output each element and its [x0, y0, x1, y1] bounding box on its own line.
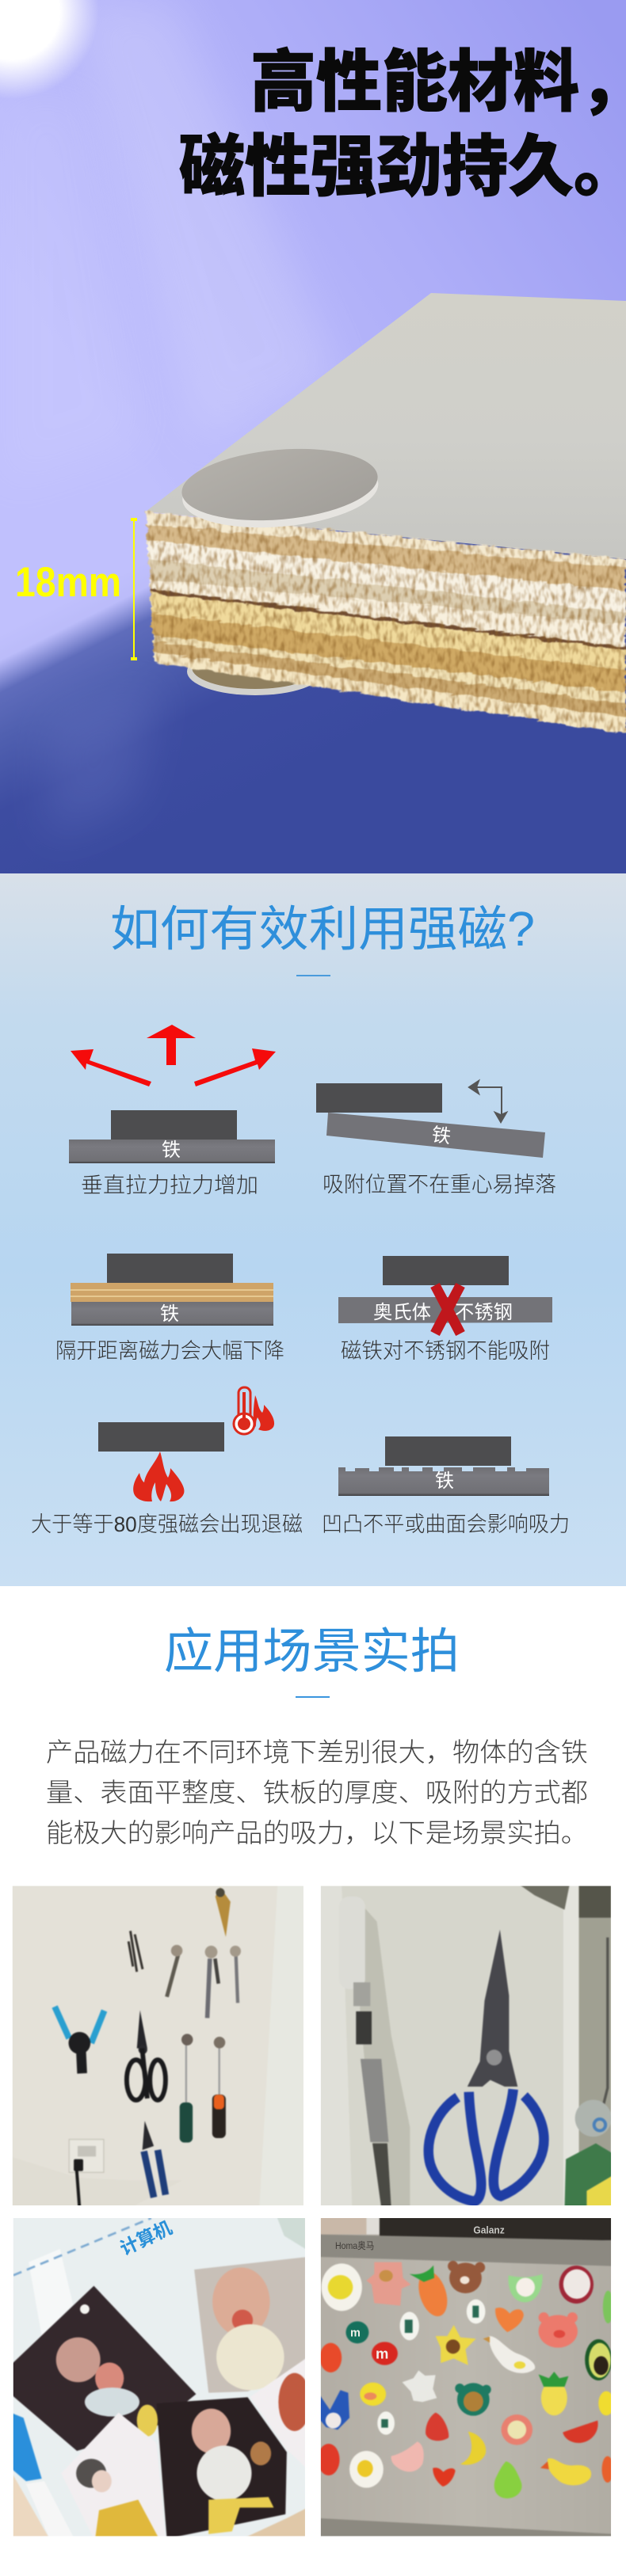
green screwdriver	[180, 2034, 193, 2143]
intro paragraph: 产品磁力在不同环境下差别很大，物体的含铁	[46, 1737, 588, 1767]
caption: 磁铁对不锈钢不能吸附	[341, 1339, 550, 1363]
tip: stainless steel	[338, 1256, 552, 1363]
heading: 如何有效利用强磁?	[110, 902, 535, 956]
m candy labels: m	[350, 2327, 361, 2340]
dimension line	[131, 518, 137, 660]
bottom magnet disc	[187, 667, 311, 695]
heading underline	[296, 1696, 330, 1698]
bent arrow	[469, 1081, 506, 1122]
magnet block	[316, 1083, 442, 1113]
hero background sky	[0, 0, 626, 873]
red hair card	[252, 2358, 305, 2465]
brand labels: Galanz	[473, 2225, 505, 2236]
top magnet disc	[182, 448, 379, 527]
frog magnet	[455, 2383, 491, 2416]
heart and pig face magnets	[495, 2308, 578, 2348]
m candy labels: m	[376, 2346, 388, 2362]
green cat and dragonfruit magnets	[509, 2266, 594, 2304]
headline	[179, 45, 626, 205]
red arrows	[71, 1025, 276, 1086]
black scissors	[127, 2010, 166, 2100]
baby with bib photo	[194, 2257, 307, 2393]
pineapple magnet	[539, 2372, 568, 2415]
board top surface	[146, 293, 626, 559]
banana and hearts magnets	[391, 2432, 486, 2487]
photo: baby photos on whiteboard	[10, 2216, 311, 2539]
tip: heat demagnetisation	[31, 1387, 303, 1536]
intro paragraph: 量、表面平整度、铁板的厚度、吸附的方式都	[46, 1778, 588, 1807]
strawberry and citrus and watermelon magnets	[426, 2413, 598, 2445]
iron plate	[69, 1140, 275, 1163]
uneven iron plate	[338, 1467, 549, 1496]
label: 18mm: 18mm	[15, 559, 121, 606]
brand labels	[335, 2225, 505, 2251]
marker and wood	[10, 2413, 307, 2539]
heading: 应用场景实拍	[164, 1624, 460, 1678]
photo: clay magnets on fridge	[318, 2216, 614, 2539]
tile magnets	[377, 2300, 485, 2435]
m candy magnets	[345, 2321, 398, 2365]
wall socket	[69, 2140, 104, 2208]
caption: 吸附位置不在重心易掉落	[323, 1173, 556, 1197]
red tomato and avocado magnets	[320, 2339, 612, 2380]
iron label: 铁	[160, 1303, 179, 1325]
heading underline	[296, 975, 330, 976]
intro paragraph	[46, 1737, 588, 1847]
tip: uneven surface	[322, 1436, 570, 1536]
iron label: 铁	[430, 1124, 452, 1148]
pig and carrot magnets	[366, 2262, 452, 2320]
sunflower star magnet	[436, 2325, 476, 2365]
orange screwdriver	[212, 2037, 226, 2138]
bear magnet	[448, 2261, 485, 2293]
magnet block	[383, 1256, 509, 1285]
scissor blades	[468, 1930, 517, 2087]
iron label: 铁	[435, 1471, 454, 1492]
plate label	[373, 1302, 513, 1323]
icon: thermometer	[234, 1387, 254, 1434]
photo: tools on magnetic wall	[10, 1883, 305, 2208]
tilted iron plate	[326, 1113, 545, 1158]
photo: blue scissors on fridge side	[319, 1883, 613, 2208]
drill bits	[128, 1931, 143, 1972]
icon: small flame	[254, 1395, 274, 1431]
pear and duck magnets	[494, 2458, 591, 2498]
panel: how to use strong magnets	[0, 873, 626, 1586]
stainless plate	[338, 1297, 552, 1323]
panel: hero product image	[0, 0, 626, 873]
panel: real scene photos	[10, 1624, 614, 2539]
fried egg magnets	[322, 2263, 384, 2488]
plate label: 不锈钢	[455, 1302, 513, 1323]
wrenches	[167, 1945, 241, 2018]
boy card	[61, 2413, 166, 2539]
handwritten label: 计算机	[116, 2217, 175, 2259]
tweezers with shadow	[339, 1897, 410, 2208]
white star and chick magnets	[360, 2370, 614, 2415]
red cross	[435, 1285, 460, 1334]
magnet block	[111, 1110, 237, 1140]
magnet block	[385, 1436, 511, 1466]
intro paragraph: 能极大的影响产品的吸力，以下是场景实拍。	[46, 1818, 588, 1847]
caption: 凹凸不平或曲面会影响吸力	[322, 1512, 570, 1536]
left and right edge magnets	[318, 2291, 613, 2483]
goose magnet	[483, 2336, 535, 2373]
tip: vertical pull	[69, 1025, 276, 1197]
brand labels: Homa奥马	[335, 2240, 374, 2251]
iron label: 铁	[162, 1140, 181, 1161]
plate label: 奥氏体	[373, 1302, 431, 1323]
magnet block	[107, 1254, 233, 1283]
baby in yellow pants photo	[156, 2397, 287, 2539]
hook and box	[564, 1938, 613, 2208]
dark baby photo	[10, 2286, 196, 2451]
magnet block	[98, 1422, 224, 1452]
plywood board cross-section	[146, 512, 626, 733]
tip: separation gap	[55, 1254, 284, 1363]
iron plate	[71, 1302, 273, 1326]
step drill	[216, 1887, 231, 1937]
tip: off-centre placement	[316, 1081, 556, 1197]
caption: 隔开距离磁力会大幅下降	[55, 1339, 284, 1363]
caption: 垂直拉力拉力增加	[81, 1174, 258, 1197]
wire stripper	[55, 2007, 105, 2073]
blue handles	[429, 2089, 544, 2201]
bunny magnet	[319, 2390, 349, 2430]
icon: big flame	[133, 1452, 185, 1501]
pliers	[143, 2121, 166, 2197]
wood spacer	[71, 1283, 273, 1302]
m candy labels	[350, 2327, 388, 2362]
caption: 大于等于80度强磁会出现退磁	[31, 1512, 303, 1536]
